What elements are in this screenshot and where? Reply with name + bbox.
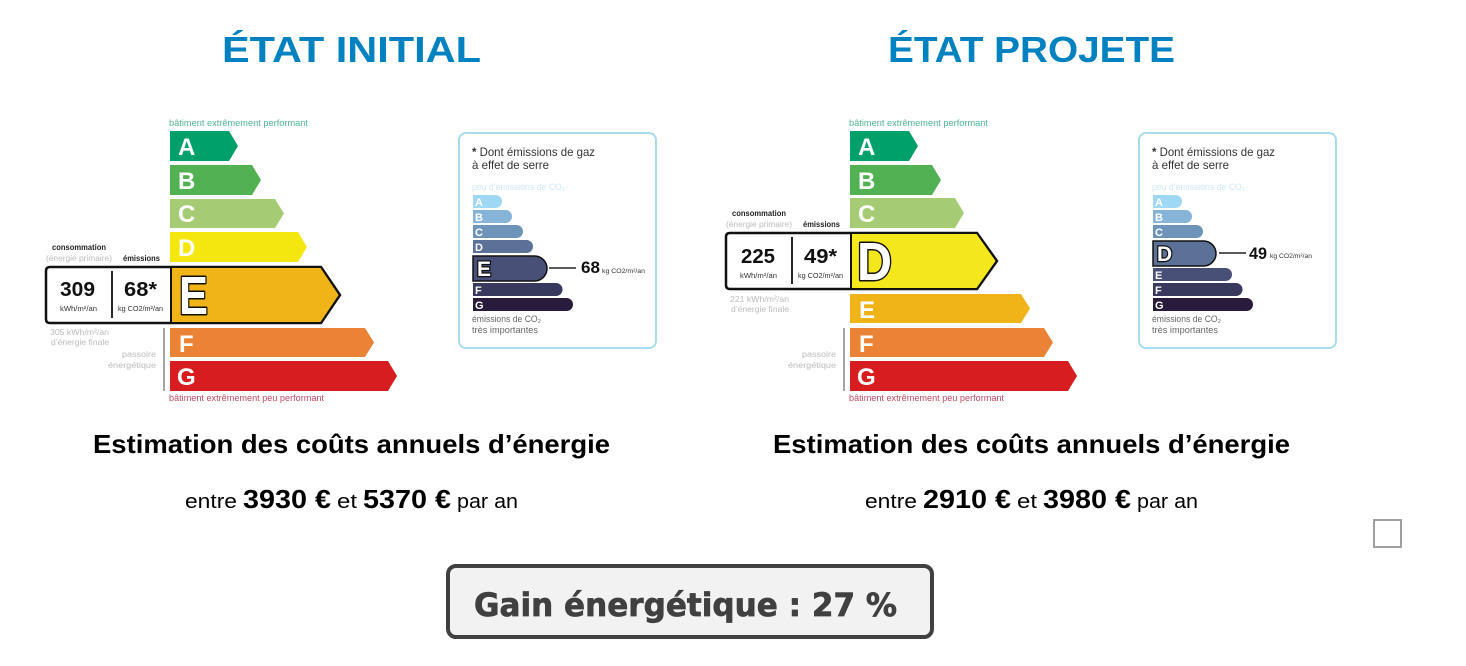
passoire énergétique note: énergétique (788, 360, 836, 370)
band A (850, 131, 918, 161)
cost range initial: 3930 € (243, 484, 331, 514)
band E (850, 294, 1030, 324)
cost range projected: 2910 € (923, 484, 1011, 514)
empty checkbox (1374, 520, 1401, 547)
bar D (473, 240, 533, 254)
bar G: G (475, 300, 484, 312)
active bar D with value: kg CO2/m²/an (1270, 253, 1312, 260)
heading: annual costs projected: Estimation des coûts annuels d’énergie (773, 429, 1290, 459)
band C (850, 198, 964, 228)
passoire énergétique note: passoire (122, 349, 156, 359)
active band D with values: D (857, 232, 892, 292)
bar F (1153, 283, 1242, 297)
bar G: G (1155, 300, 1164, 312)
band E: E (859, 297, 875, 324)
energy label: initial state (46, 118, 397, 403)
caption: top performance: bâtiment extrêmement performant (169, 118, 309, 128)
bar G (473, 298, 573, 312)
passoire énergétique note: énergétique (108, 360, 156, 370)
cost range projected: 3980 € (1043, 484, 1131, 514)
band F (850, 328, 1053, 358)
active bar E with value: E (477, 258, 491, 281)
final energy note: 305 kWh/m²/an (50, 327, 109, 337)
band A: A (178, 134, 195, 161)
band D (170, 232, 307, 262)
bar A: A (475, 197, 483, 209)
band C (170, 199, 284, 228)
bar C (473, 225, 523, 239)
active bar E with value (473, 256, 645, 281)
cost range initial: 5370 € (363, 484, 451, 514)
active band D with values: kg CO2/m²/an (798, 271, 843, 280)
active bar E with value: 68 (581, 259, 600, 277)
final energy note: d’énergie finale (731, 304, 789, 314)
band F: F (179, 331, 194, 358)
passoire énergétique note (788, 328, 845, 391)
cost range initial: par an (457, 491, 518, 513)
bar E (1153, 268, 1232, 282)
column headers: émissions (803, 219, 840, 229)
bar F (473, 283, 563, 297)
active band E with values: kg CO2/m²/an (118, 304, 163, 313)
column headers: (énergie primaire) (46, 253, 112, 263)
panel heading (1152, 145, 1275, 172)
low emissions caption: peu d’émissions de CO₂ (1152, 182, 1245, 193)
active band E with values: E (179, 266, 208, 326)
bar D: D (475, 242, 483, 254)
energy label: projected state (726, 118, 1077, 403)
column headers: consommation (52, 242, 106, 252)
caption: low performance: bâtiment extrêmement peu performant (849, 393, 1005, 403)
panel heading: à effet de serre (1152, 158, 1229, 172)
active band E with values: 309 (60, 279, 95, 301)
active band E with values (46, 266, 340, 326)
passoire énergétique note: passoire (802, 349, 836, 359)
bar A: A (1155, 197, 1163, 209)
active band E with values: kWh/m²/an (60, 304, 97, 313)
band B: B (858, 168, 875, 195)
bar B (1153, 210, 1192, 224)
column headers: (énergie primaire) (726, 219, 792, 229)
high emissions caption (1152, 314, 1221, 336)
active bar D with value: 49 (1249, 245, 1267, 263)
cost range projected: entre (865, 491, 917, 513)
final energy note (730, 294, 789, 314)
cost range projected: par an (1137, 491, 1198, 513)
bar B: B (475, 212, 483, 224)
band F (170, 328, 374, 358)
final energy note (50, 327, 109, 347)
band A (170, 131, 238, 161)
band F: F (859, 331, 874, 358)
active band D with values: 225 (741, 246, 775, 268)
caption: low performance: bâtiment extrêmement peu performant (169, 393, 325, 403)
cost range initial: entre (185, 491, 237, 513)
active band D with values (726, 232, 997, 292)
panel heading: * Dont émissions de gaz (472, 145, 595, 159)
high emissions caption: émissions de CO₂ (1152, 314, 1221, 325)
heading: annual costs initial: Estimation des coûts annuels d’énergie (93, 429, 610, 459)
bar A (1153, 195, 1182, 209)
band B: B (178, 168, 195, 195)
high emissions caption: émissions de CO₂ (472, 314, 541, 325)
band G: G (177, 364, 196, 391)
active bar E with value: kg CO2/m²/an (602, 268, 645, 275)
passoire énergétique note (108, 328, 165, 391)
bar B (473, 210, 512, 224)
active band D with values: kWh/m²/an (740, 271, 777, 280)
active bar D with value: D (1157, 243, 1172, 266)
high emissions caption: très importantes (472, 325, 538, 336)
title: état projeté: ÉTAT PROJETE (888, 29, 1175, 70)
panel: CO2 projected (1139, 133, 1336, 348)
cost range projected: et (1017, 491, 1038, 513)
bar C: C (1155, 227, 1163, 239)
band C: C (858, 201, 875, 228)
band B (850, 165, 941, 195)
cost range initial: et (337, 491, 358, 513)
callout: energy gain: Gain énergétique : 27 % (474, 586, 897, 624)
low emissions caption: peu d’émissions de CO₂ (472, 182, 565, 193)
caption: top performance: bâtiment extrêmement performant (849, 118, 989, 128)
active band D with values: 49* (804, 246, 837, 268)
panel heading (472, 145, 595, 172)
band D: D (178, 235, 195, 262)
column headers: émissions (123, 253, 160, 263)
bar F: F (475, 285, 482, 297)
high emissions caption: très importantes (1152, 325, 1218, 336)
cost range projected (865, 484, 1198, 514)
bar G (1153, 298, 1253, 312)
bar A (473, 195, 502, 209)
bar C: C (475, 227, 483, 239)
active band E with values: 68* (124, 279, 157, 301)
band C: C (178, 201, 195, 228)
bar E: E (1155, 270, 1162, 282)
title: état initial: ÉTAT INITIAL (222, 29, 481, 70)
column headers (726, 208, 840, 229)
final energy note: d’énergie finale (51, 337, 109, 347)
cost range initial (185, 484, 518, 514)
final energy note: 221 kWh/m²/an (730, 294, 789, 304)
bar C (1153, 225, 1203, 239)
panel heading: * Dont émissions de gaz (1152, 145, 1275, 159)
band G (170, 361, 397, 391)
band G (850, 361, 1077, 391)
panel: CO2 initial (459, 133, 656, 348)
column headers (46, 242, 160, 263)
callout: energy gain (448, 566, 932, 637)
bar B: B (1155, 212, 1163, 224)
band G: G (857, 364, 876, 391)
band B (170, 165, 261, 195)
column headers: consommation (732, 208, 786, 218)
band A: A (858, 134, 875, 161)
high emissions caption (472, 314, 541, 336)
active bar D with value (1153, 241, 1312, 266)
bar F: F (1155, 285, 1162, 297)
panel heading: à effet de serre (472, 158, 549, 172)
